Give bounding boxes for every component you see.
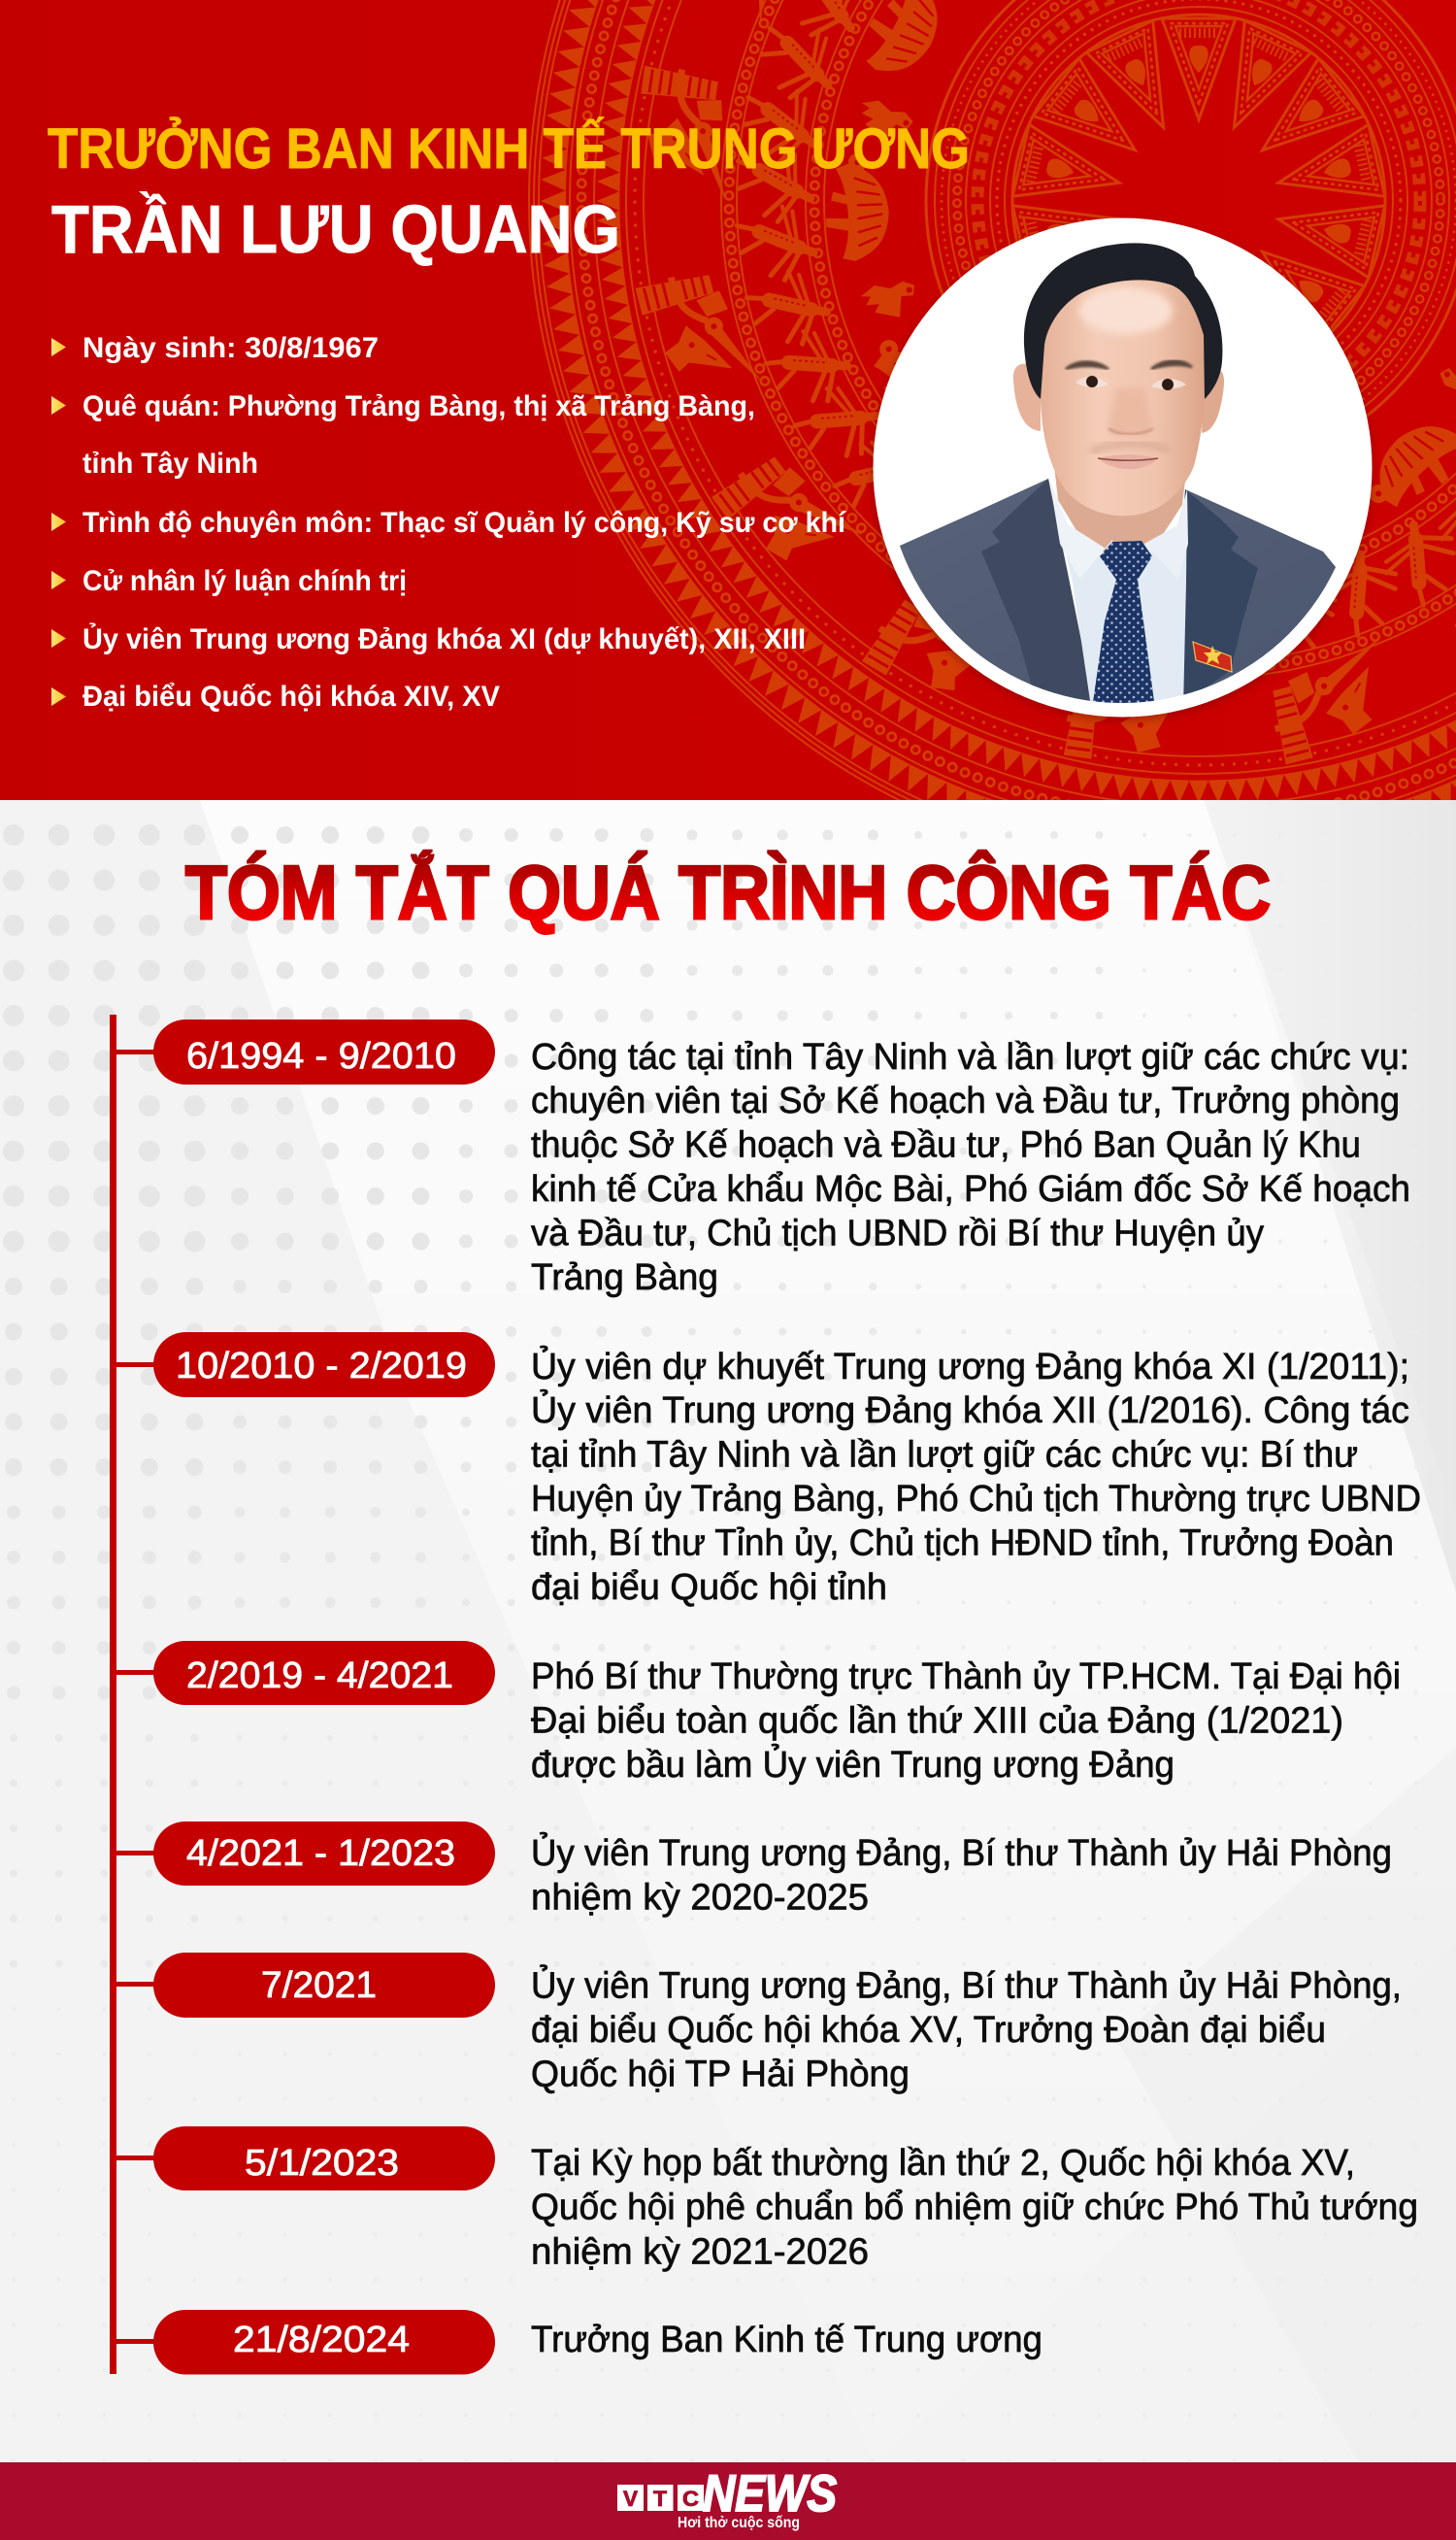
face bbox=[1041, 272, 1205, 516]
lower background panel bbox=[0, 800, 1456, 2462]
timeline entry 2: đại biểu Quốc hội tỉnh bbox=[531, 1567, 887, 1608]
lapels bbox=[981, 479, 1097, 719]
portrait photo bbox=[874, 217, 1373, 723]
timeline entry 2: Ủy viên Trung ương Đảng khóa XII (1/2016). Công tác bbox=[531, 1388, 1409, 1431]
timeline entry 7: 21/8/2024 bbox=[233, 2320, 410, 2360]
timeline entry 4 bbox=[116, 1821, 1392, 1919]
tie bbox=[1092, 541, 1155, 709]
bullet: birth date: Ngày sinh: 30/8/1967 bbox=[83, 332, 379, 364]
timeline entry 1: kinh tế Cửa khẩu Mộc Bài, Phó Giám đốc Sở Kế hoạch bbox=[531, 1169, 1410, 1210]
hair bbox=[1024, 243, 1222, 399]
timeline bbox=[110, 1015, 1421, 2375]
jacket bbox=[900, 479, 1336, 701]
timeline entry 3: 2/2019 - 4/2021 bbox=[186, 1655, 453, 1696]
section heading: TÓM TẮT QUÁ TRÌNH CÔNG TÁC bbox=[185, 850, 1271, 935]
timeline entry 6 bbox=[116, 2126, 1418, 2272]
bullet: political theory: Cử nhân lý luận chính trị bbox=[83, 565, 407, 597]
timeline entry 3: Đại biểu toàn quốc lần thứ XIII của Đảng (1/2021) bbox=[531, 1701, 1343, 1742]
bullet: central committee: Ủy viên Trung ương Đảng khóa XI (dự khuyết), XII, XIII bbox=[83, 622, 806, 655]
timeline entry 6: nhiệm kỳ 2021-2026 bbox=[531, 2231, 869, 2272]
timeline entry 5: 7/2021 bbox=[261, 1965, 377, 2006]
timeline entry 6: Quốc hội phê chuẩn bổ nhiệm giữ chức Phó Thủ tướng bbox=[531, 2187, 1418, 2227]
timeline entry 7: Trưởng Ban Kinh tế Trung ương bbox=[531, 2320, 1042, 2360]
VTC News logo bbox=[617, 2465, 837, 2531]
VTC News logo: T bbox=[653, 2487, 668, 2511]
header panel bbox=[0, 0, 1456, 800]
bullet: hometown bbox=[51, 390, 755, 480]
bullet: qualification: Trình độ chuyên môn: Thạc sĩ Quản lý công, Kỹ sư cơ khí bbox=[83, 507, 847, 539]
timeline entry 2: 10/2010 - 2/2019 bbox=[176, 1346, 467, 1387]
timeline entry 2: tại tỉnh Tây Ninh và lần lượt giữ các chức vụ: Bí thư bbox=[531, 1435, 1358, 1476]
mouth bbox=[1098, 454, 1158, 469]
name: TRẦN LƯU QUANG bbox=[51, 191, 620, 267]
collar bbox=[1049, 479, 1116, 579]
timeline entry 1 bbox=[116, 1019, 1410, 1298]
timeline spine bbox=[110, 1015, 116, 2374]
ears bbox=[1013, 364, 1041, 431]
VTC News logo: NEWS bbox=[703, 2465, 837, 2523]
timeline entry 1: thuộc Sở Kế hoạch và Đầu tư, Phó Ban Quản lý Khu bbox=[531, 1124, 1361, 1165]
timeline entry 3 bbox=[116, 1641, 1401, 1786]
timeline entry 1: chuyên viên tại Sở Kế hoạch và Đầu tư, Trưởng phòng bbox=[531, 1081, 1400, 1121]
timeline entry 4: Ủy viên Trung ương Đảng, Bí thư Thành ủy Hải Phòng bbox=[531, 1831, 1392, 1874]
eyebrows bbox=[1066, 360, 1192, 369]
timeline entry 1: 6/1994 - 9/2010 bbox=[186, 1036, 456, 1077]
timeline entry 2: Ủy viên dự khuyết Trung ương Đảng khóa XI (1/2011); bbox=[531, 1345, 1409, 1387]
timeline entry 2 bbox=[116, 1332, 1421, 1608]
bullet: hometown: tỉnh Tây Ninh bbox=[83, 448, 258, 480]
timeline entry 1: Trảng Bàng bbox=[531, 1257, 718, 1298]
timeline entry 5: đại biểu Quốc hội khóa XV, Trưởng Đoàn đại biểu bbox=[531, 2010, 1326, 2051]
timeline entry 5: Quốc hội TP Hải Phòng bbox=[531, 2055, 910, 2095]
timeline entry 6: 5/1/2023 bbox=[245, 2143, 399, 2184]
bullet: hometown: Quê quán: Phường Trảng Bàng, thị xã Trảng Bàng, bbox=[83, 390, 755, 422]
party pin bbox=[1193, 642, 1232, 672]
timeline entry 2: tỉnh, Bí thư Tỉnh ủy, Chủ tịch HĐND tỉnh, Trưởng Đoàn bbox=[531, 1522, 1394, 1563]
eyes bbox=[1075, 377, 1186, 389]
timeline entry 1: Công tác tại tỉnh Tây Ninh và lần lượt giữ các chức vụ: bbox=[531, 1037, 1409, 1078]
nose and shading bbox=[1109, 388, 1153, 436]
timeline entry 4: nhiệm kỳ 2020-2025 bbox=[531, 1878, 869, 1919]
timeline entry 4: 4/2021 - 1/2023 bbox=[186, 1833, 455, 1874]
forehead highlight bbox=[1079, 287, 1173, 334]
title: TRƯỞNG BAN KINH TẾ TRUNG ƯƠNG bbox=[48, 117, 970, 181]
timeline entry 6: Tại Kỳ họp bất thường lần thứ 2, Quốc hội khóa XV, bbox=[531, 2143, 1355, 2184]
moustache shadow bbox=[1091, 444, 1168, 452]
timeline entry 2: Huyện ủy Trảng Bàng, Phó Chủ tịch Thường trực UBND bbox=[531, 1479, 1421, 1520]
shirt bbox=[1049, 482, 1187, 714]
biography list bbox=[51, 332, 847, 713]
timeline entry 5: Ủy viên Trung ương Đảng, Bí thư Thành ủy Hải Phòng, bbox=[531, 1963, 1402, 2006]
neck bbox=[1054, 471, 1185, 551]
tagline: Hơi thở cuộc sống bbox=[678, 2515, 800, 2531]
decorative dots bbox=[0, 812, 1456, 2462]
VTC News logo: V bbox=[623, 2487, 638, 2511]
timeline entry 3: được bầu làm Ủy viên Trung ương Đảng bbox=[531, 1743, 1175, 1786]
timeline entry 1: và Đầu tư, Chủ tịch UBND rồi Bí thư Huyện ủy bbox=[531, 1214, 1264, 1254]
bullet: national assembly: Đại biểu Quốc hội khóa XIV, XV bbox=[83, 681, 500, 713]
decorative bronze drum pattern bbox=[191, 0, 1456, 1288]
VTC News logo: C bbox=[682, 2487, 699, 2511]
timeline entry 3: Phó Bí thư Thường trực Thành ủy TP.HCM. Tại Đại hội bbox=[531, 1656, 1401, 1697]
timeline entry 7 bbox=[116, 2310, 1042, 2375]
timeline entry 5 bbox=[116, 1953, 1402, 2095]
footer bar bbox=[0, 2462, 1456, 2540]
